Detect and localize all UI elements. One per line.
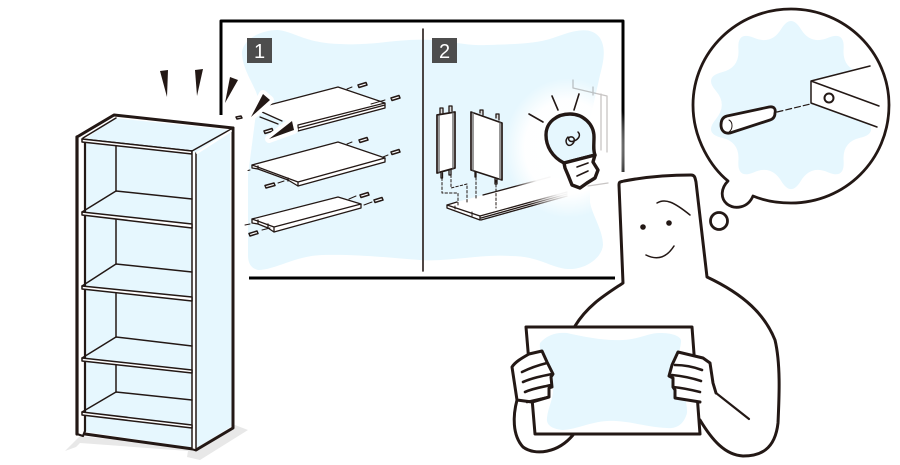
bubble outline	[693, 9, 889, 207]
divider	[422, 29, 424, 271]
ghost panel	[573, 80, 608, 186]
left hand	[512, 351, 553, 402]
wide panel	[471, 110, 502, 184]
icon: glow and light bulb	[504, 78, 632, 218]
bulb	[529, 94, 598, 188]
dowels	[236, 82, 400, 236]
white glow	[504, 78, 632, 218]
shelf 1	[260, 87, 385, 131]
shelf 2	[252, 142, 385, 186]
right hand	[669, 352, 716, 402]
dashed guides	[245, 87, 388, 230]
thought bubble	[693, 9, 889, 230]
held sheet	[526, 327, 700, 434]
small thought circle	[710, 212, 728, 230]
step badge 1	[247, 38, 272, 63]
shelves	[82, 191, 192, 431]
narrow panel	[437, 106, 455, 178]
step 2: side panels and base	[437, 106, 608, 220]
assembly dashed lines	[442, 173, 496, 208]
step badge 1: 1	[254, 41, 265, 63]
sheet background tint	[242, 30, 604, 270]
dowel detail	[721, 101, 823, 133]
head and body	[575, 175, 779, 456]
shelf corner detail	[811, 66, 879, 127]
shelf 3	[252, 197, 361, 232]
impact marks	[160, 69, 294, 139]
bookcase interior tint	[84, 118, 232, 448]
left arm	[514, 400, 573, 452]
step badge 2	[432, 38, 457, 63]
step badge 2: 2	[439, 41, 450, 63]
bubble tint	[711, 21, 871, 189]
base board	[447, 177, 608, 220]
step 1: shelves and dowels	[236, 82, 400, 236]
face	[640, 201, 690, 258]
bookcase outline	[77, 115, 233, 450]
person	[512, 175, 779, 456]
icon: bookcase	[65, 115, 248, 460]
sheet frame	[221, 21, 623, 278]
floor shadow	[65, 425, 248, 460]
arm crease	[716, 393, 749, 419]
panel: instruction sheet	[221, 21, 632, 278]
